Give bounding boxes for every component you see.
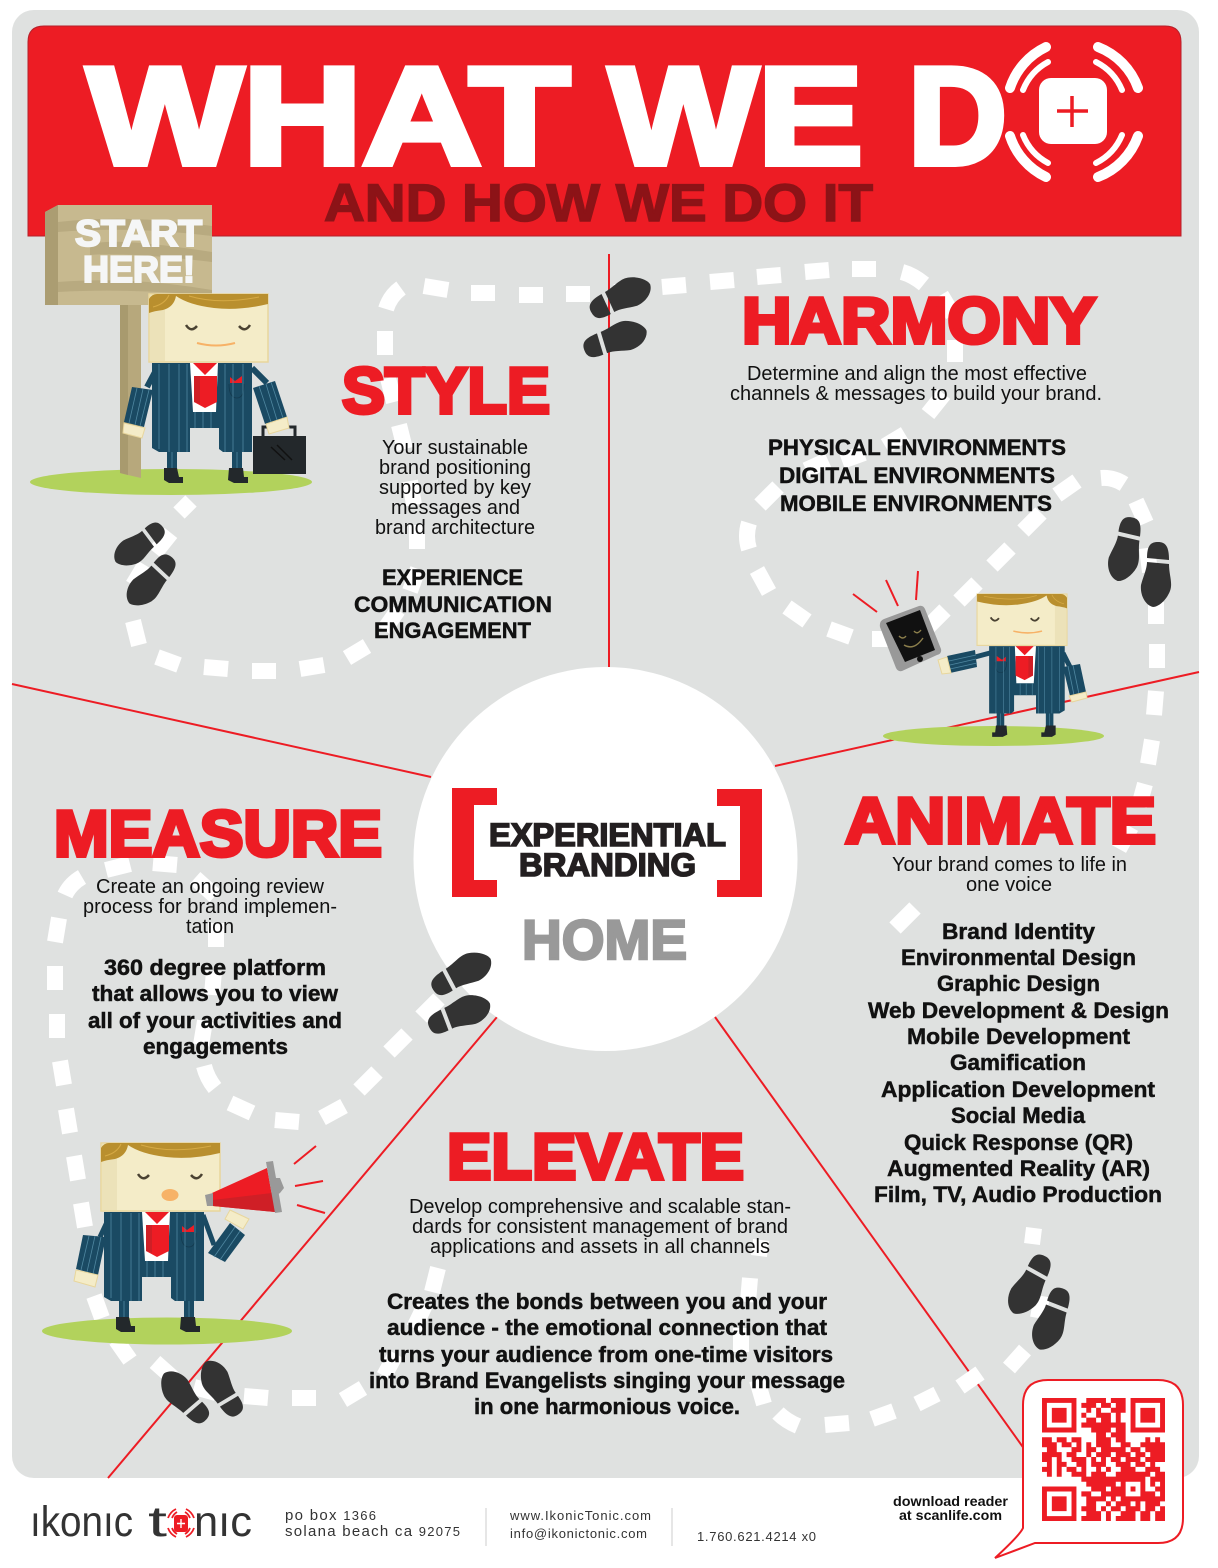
section: measure: Create an ongoing review [96,876,325,898]
footprints [108,269,1171,1429]
title: what we do: WHAT [87,39,570,194]
section: animate: Social Media [951,1103,1085,1128]
footer logo [30,1498,252,1546]
center circle: experiential branding home [414,667,798,1051]
section: style: ENGAGEMENT [374,618,531,643]
center heading: EXPERIENTIAL [489,817,726,853]
section: measure: tation [186,916,234,938]
section: measure: that allows you to view [92,981,338,1006]
section: elevate: Develop comprehensive and scalable stan- [409,1196,791,1218]
character: tablet [853,571,1104,746]
section: style: messages and [391,497,520,519]
arms [123,368,289,438]
section: elevate: audience - the emotional connection that [387,1315,828,1340]
briefcase [253,427,306,474]
section: animate: Graphic Design [937,971,1100,996]
sign text [75,213,202,290]
section: style: brand architecture [375,517,535,539]
signal ticks [853,571,918,612]
footer contact: www.IkonicTonic.com [509,1508,651,1523]
section: style: brand positioning [379,457,531,479]
logo icon [168,1509,194,1537]
QR speech bubble [995,1380,1183,1558]
section: elevate: Creates the bonds between you and your [387,1289,827,1314]
arms [74,1210,249,1287]
footer contact: 1.760.621.4214 x0 [697,1529,816,1544]
footer address: solana beach ca 92075 [285,1523,460,1540]
section: harmony: HARMONY [742,284,1096,357]
title: what we do: D [908,39,1007,194]
brackets [452,788,762,897]
download note [893,1494,1009,1523]
section: harmony: PHYSICAL ENVIRONMENTS [768,435,1066,460]
subtitle: AND HOW WE DO IT [324,174,873,233]
section: animate: Augmented Reality (AR) [887,1156,1150,1181]
section: harmony [730,284,1102,516]
section: measure [54,797,382,1059]
download note: at scanlife.com [899,1508,1002,1523]
section: animate: Mobile Development [907,1024,1131,1049]
header banner [28,26,1181,236]
download note: download reader [893,1494,1009,1509]
megaphone [205,1161,284,1213]
section: elevate: turns your audience from one-time visitors [379,1342,833,1367]
section: elevate: applications and assets in all channels [430,1236,770,1258]
title: what we do: WE [609,39,863,194]
sign text: HERE! [83,249,195,290]
title: what we do [87,39,1007,194]
character: start here with sign and briefcase [30,205,312,495]
section: measure: MEASURE [54,797,382,870]
section: animate: Brand Identity [942,919,1095,944]
QR code [1042,1400,1165,1519]
center heading: BRANDING [519,847,696,883]
footer contact [509,1508,816,1544]
section: animate: Your brand comes to life in [892,854,1127,876]
section: animate [845,784,1169,1207]
section: style: Your sustainable [382,437,528,459]
mouth [162,1189,178,1201]
sign text: START [75,213,202,254]
figure [149,294,268,483]
figure [977,594,1067,737]
section: harmony: channels & messages to build your brand. [730,383,1102,405]
dashed walking path [55,269,1157,1426]
icon: phone with signal waves [1010,47,1138,177]
section: harmony: MOBILE ENVIRONMENTS [780,491,1052,516]
section: animate: Web Development & Design [868,998,1169,1023]
footer contact: info@ikonictonic.com [510,1526,647,1541]
section: style: COMMUNICATION [354,592,552,617]
character: megaphone [42,1143,325,1344]
section: style: STYLE [342,354,550,427]
sound ticks [294,1146,325,1213]
footer address: po box 1366 [285,1507,376,1524]
section: style: supported by key [379,477,531,499]
footer logo: nıc [194,1498,252,1546]
section: elevate [369,1120,845,1419]
section: measure: process for brand implemen- [83,896,337,918]
section: harmony: Determine and align the most effective [747,363,1087,385]
sign post [120,305,141,478]
footer logo: ıkonıc [30,1498,133,1546]
section: elevate: in one harmonious voice. [474,1394,740,1419]
section: animate: Gamification [950,1050,1086,1075]
divider lines [12,254,1199,1478]
center heading [489,817,726,883]
home label: HOME [522,908,687,971]
section: animate: Quick Response (QR) [904,1130,1133,1155]
section: animate: ANIMATE [845,784,1156,857]
footer logo: t [148,1498,167,1546]
section: elevate: into Brand Evangelists singing your message [369,1368,845,1393]
arms [938,650,1087,702]
section: measure: all of your activities and [88,1008,342,1033]
sign board [45,205,212,305]
section: animate: one voice [966,874,1052,896]
tablet device [880,606,941,671]
section: animate: Film, TV, Audio Production [874,1182,1162,1207]
footer address [285,1507,460,1540]
section: harmony: DIGITAL ENVIRONMENTS [779,463,1055,488]
section: elevate: ELEVATE [447,1120,744,1193]
section: animate: Application Development [881,1077,1156,1102]
section: style: EXPERIENCE [382,565,523,590]
section: elevate: dards for consistent management of brand [412,1216,788,1238]
section: animate: Environmental Design [901,945,1136,970]
section: style [342,354,552,643]
section: measure: engagements [143,1034,288,1059]
section: measure: 360 degree platform [104,955,326,980]
